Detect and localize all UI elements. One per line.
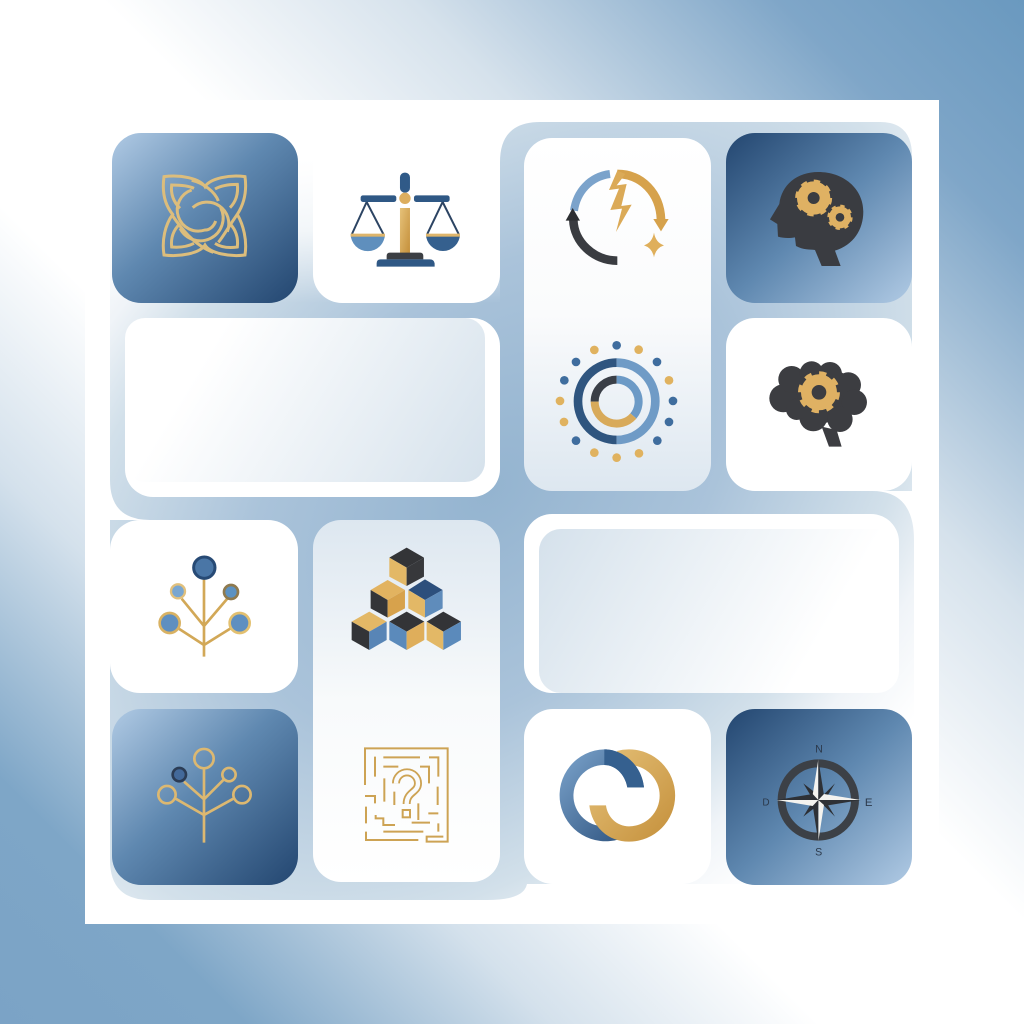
panel: tree tile [110,520,298,693]
icon: compass rose: S [815,847,822,859]
panel: head with gears tile [726,133,912,303]
icon: compass rose [762,743,873,859]
icon: interlocking rings [560,749,675,842]
icon: compass rose: E [865,797,873,809]
icon: radial rings and dots [556,341,677,462]
icon: node tree light [160,557,250,657]
panel: compass tile [726,709,912,885]
icon: balance scales [351,173,460,267]
panel: tall tile with cycle and radial icons [524,138,711,491]
icon: cycle with lightning [566,171,669,261]
icon: celtic knot [163,176,246,256]
icon: compass rose: N [815,743,823,755]
icon: node tree dark [158,749,251,843]
panel: tall tile with cubes and maze [313,520,500,882]
panel: tree tile dark [112,709,298,885]
connecting backdrop shape [108,120,914,900]
panel: empty wide tile upper left [125,318,500,497]
panel: empty wide tile lower right [524,514,899,693]
panel: knot tile [112,133,298,303]
icon: stacked cubes [352,548,461,650]
panel: scales tile [313,136,500,303]
icon: compass rose: D [762,797,770,808]
icon: head with gears [770,172,863,266]
panel: brain tile [726,318,912,491]
icon: brain with gear [769,361,867,447]
main white frame [85,100,939,924]
icon: maze with question mark [365,748,448,842]
panel: interlocking rings tile [524,709,711,884]
